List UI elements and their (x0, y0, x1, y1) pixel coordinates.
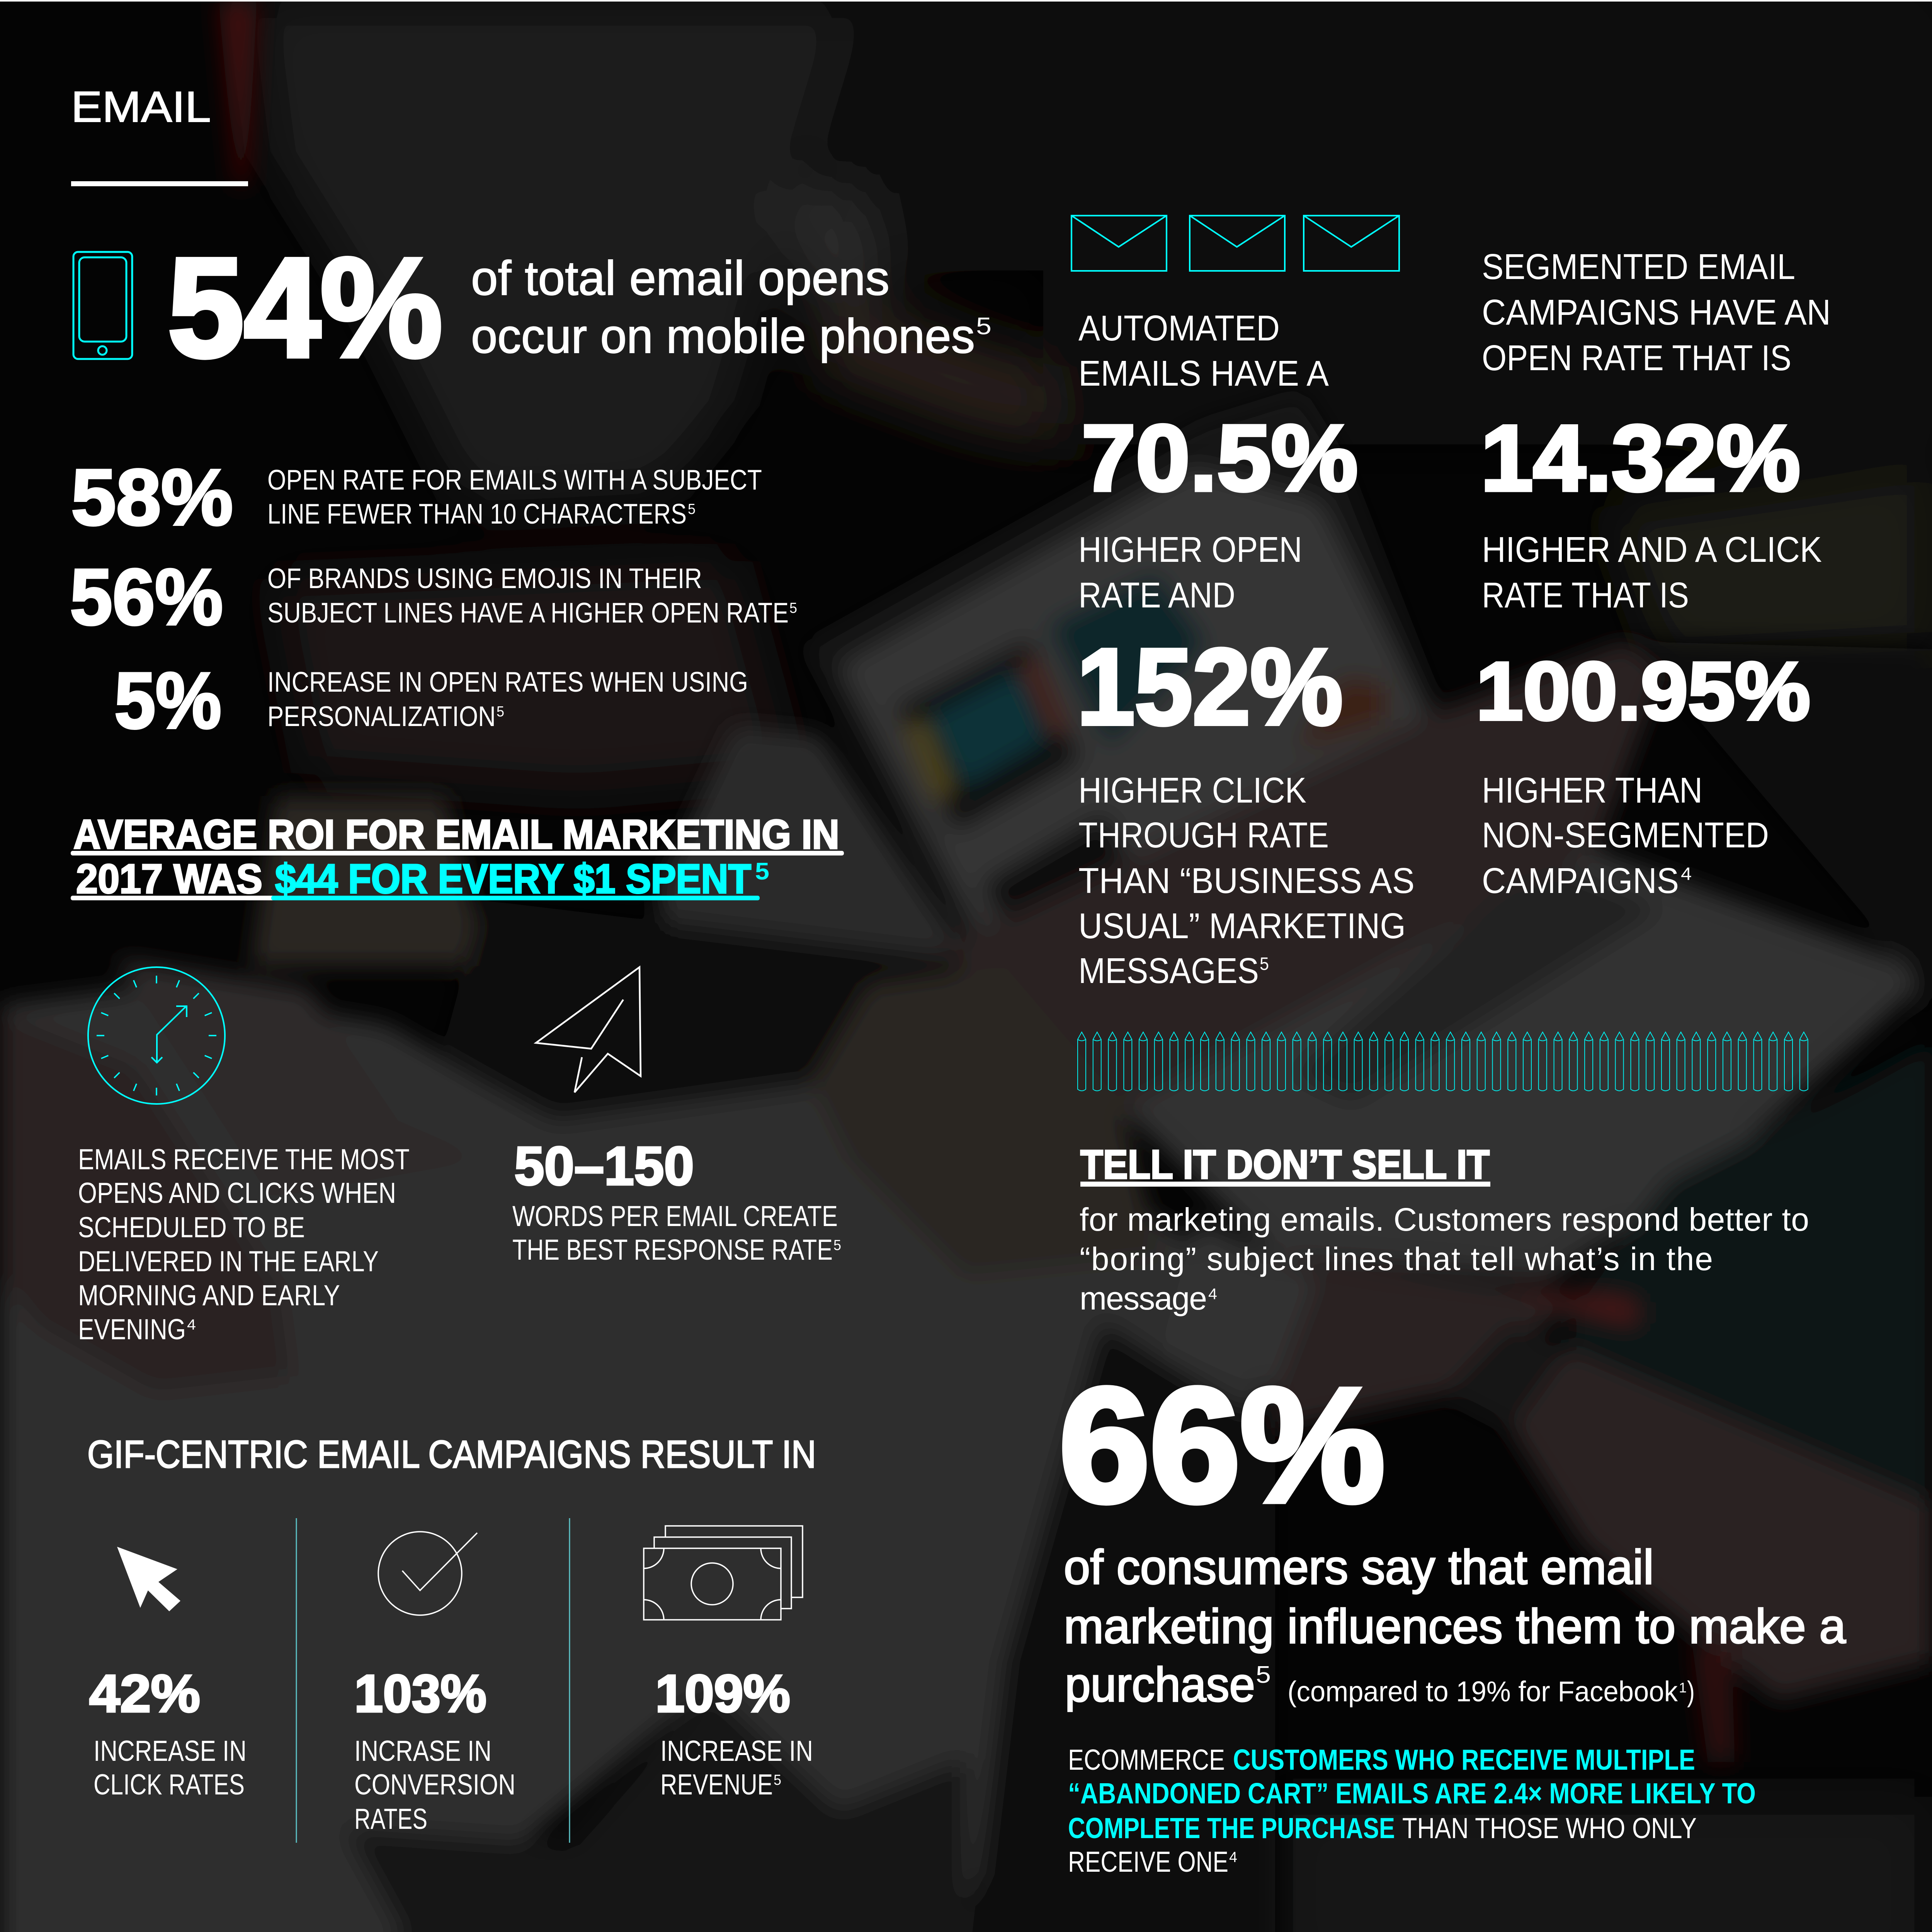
text: consumers influenced (1064, 1541, 1846, 1712)
column: segmented campaigns: 100.95% (1476, 645, 1810, 737)
column: automated emails: RATE AND (1078, 575, 1235, 615)
text: consumers influenced: (compared to 19% for Facebook (1287, 1675, 1678, 1708)
column: automated emails: EMAILS HAVE A (1078, 353, 1329, 393)
column: automated emails: AUTOMATED (1078, 308, 1280, 348)
stat: 109% revenue: REVENUE (660, 1768, 773, 1801)
text: best send time: MORNING AND EARLY (78, 1279, 340, 1311)
icon: mobile phone (73, 252, 132, 359)
stat: 109% revenue: INCREASE IN (660, 1735, 813, 1767)
column: segmented campaigns: NON-SEGMENTED (1482, 815, 1769, 855)
heading: average ROI: 5 (755, 858, 769, 885)
text: ecommerce abandoned cart (1068, 1743, 1756, 1878)
column: automated emails: HIGHER OPEN (1078, 529, 1302, 570)
column: automated emails (1077, 308, 1415, 991)
icon: clock (88, 967, 225, 1104)
text: marketing emails advice (1080, 1201, 1809, 1316)
stat: 5% personalization: 5 (497, 704, 504, 720)
text: consumers influenced: 5 (1256, 1662, 1271, 1688)
stat: 103% conversion: INCRASE IN (354, 1735, 492, 1767)
text: consumers influenced: 1 (1679, 1680, 1687, 1696)
stat: 5% personalization (114, 656, 748, 745)
stat: 42% click rates: INCREASE IN (94, 1735, 247, 1767)
text: best send time: EMAILS RECEIVE THE MOST (78, 1143, 410, 1175)
stat: 54% of total email opens: 54% (168, 229, 442, 386)
icon: cursor arrow (117, 1547, 180, 1611)
stat: 54% of total email opens: 5 (976, 313, 992, 340)
stat: 66%: 66% (1059, 1355, 1385, 1536)
text: ecommerce abandoned cart: COMPLETE THE PURCHASE (1068, 1812, 1395, 1844)
stat: 103% conversion (354, 1664, 515, 1835)
text: ecommerce abandoned cart: ECOMMERCE (1068, 1743, 1225, 1776)
text: best send time: OPENS AND CLICKS WHEN (78, 1177, 396, 1209)
column: automated emails: 152% (1077, 627, 1343, 747)
stat: 5% personalization: INCREASE IN OPEN RATES WHEN USING (267, 667, 748, 698)
text: best send time: DELIVERED IN THE EARLY (78, 1245, 379, 1277)
column: segmented campaigns: RATE THAT IS (1482, 575, 1689, 615)
title: EMAIL: EMAIL (71, 83, 211, 131)
text: ecommerce abandoned cart: 4 (1229, 1849, 1237, 1866)
text: marketing emails advice: for marketing emails. Customers respond better to (1080, 1201, 1809, 1238)
column: segmented campaigns: CAMPAIGNS (1482, 861, 1679, 901)
column: segmented campaigns: HIGHER THAN (1482, 770, 1702, 810)
text: ecommerce abandoned cart: “ABANDONED CART” EMAILS ARE 2.4× MORE LIKELY TO (1068, 1777, 1756, 1810)
column: automated emails: 70.5% (1082, 406, 1358, 510)
heading: tell it don't sell it: TELL IT DON’T SELL IT (1080, 1142, 1490, 1187)
stat: 58% open rate: 5 (688, 501, 696, 517)
column: segmented campaigns: 4 (1681, 864, 1692, 884)
column: automated emails: THROUGH RATE (1078, 815, 1329, 855)
column: segmented campaigns: HIGHER AND A CLICK (1482, 529, 1822, 570)
text: best send time (78, 1143, 410, 1345)
stat: 42% click rates: CLICK RATES (94, 1768, 245, 1801)
stat: 58% open rate: LINE FEWER THAN 10 CHARACTERS (267, 498, 687, 530)
text: consumers influenced: of consumers say that email (1064, 1541, 1654, 1594)
text: consumers influenced: marketing influences them to make a (1064, 1600, 1846, 1653)
stat: 50-150 words: THE BEST RESPONSE RATE (512, 1233, 833, 1266)
column: automated emails: USUAL” MARKETING (1078, 906, 1406, 946)
text: ecommerce abandoned cart: THAN THOSE WHO ONLY (1402, 1812, 1697, 1844)
title rule (71, 181, 248, 186)
stat: 58% open rate: OPEN RATE FOR EMAILS WITH A SUBJECT (267, 464, 762, 496)
text: marketing emails advice: “boring” subject lines that tell what’s in the (1080, 1241, 1713, 1277)
column: automated emails: MESSAGES (1078, 951, 1259, 991)
icon: paper plane (536, 967, 641, 1092)
column: segmented campaigns: 14.32% (1481, 406, 1800, 510)
stat: 103% conversion: CONVERSION (354, 1768, 515, 1801)
text: best send time: 4 (187, 1317, 196, 1333)
stat: 56% emojis: OF BRANDS USING EMOJIS IN THEIR (267, 563, 702, 594)
text: consumers influenced: purchase (1065, 1658, 1255, 1712)
stat: 54% of total email opens: of total email opens (471, 252, 889, 305)
stat: 5% personalization: PERSONALIZATION (267, 701, 496, 732)
stat: 50-150 words: 50–150 (514, 1135, 694, 1196)
divider lines (296, 1518, 570, 1843)
stat: 54% of total email opens: occur on mobile phones (471, 310, 975, 363)
column: segmented campaigns: OPEN RATE THAT IS (1482, 338, 1791, 378)
stat: 42% click rates: 42% (89, 1664, 200, 1723)
text: marketing emails advice: 4 (1208, 1286, 1217, 1303)
stat: 109% revenue (655, 1664, 813, 1801)
heading: average ROI: $44 FOR EVERY $1 SPENT (275, 855, 751, 902)
icon: check circle (378, 1532, 477, 1615)
stat: 50-150 words (512, 1135, 841, 1266)
stat: 56% emojis: SUBJECT LINES HAVE A HIGHER OPEN RATE (267, 597, 789, 629)
stat: 109% revenue: 109% (655, 1664, 790, 1723)
text: ecommerce abandoned cart: RECEIVE ONE (1068, 1845, 1228, 1878)
stat: 58% open rate (71, 453, 762, 542)
text: consumers influenced: ) (1687, 1675, 1695, 1708)
icon: banknotes (644, 1526, 803, 1620)
stat: 56% emojis: 5 (789, 600, 797, 616)
heading: average ROI: 2017 WAS (76, 855, 262, 902)
pencil row pictogram (1078, 1032, 1808, 1091)
stat: 50-150 words: WORDS PER EMAIL CREATE (512, 1200, 838, 1232)
text: ecommerce abandoned cart: CUSTOMERS WHO RECEIVE MULTIPLE (1233, 1743, 1695, 1776)
heading: GIF-centric campaigns: GIF-CENTRIC EMAIL CAMPAIGNS RESULT IN (87, 1433, 816, 1476)
column: segmented campaigns: SEGMENTED EMAIL (1482, 247, 1795, 287)
text: marketing emails advice: message (1080, 1280, 1207, 1316)
text: best send time: EVENING (78, 1313, 186, 1345)
stat: 109% revenue: 5 (774, 1772, 781, 1788)
stat: 54% of total email opens (168, 229, 992, 386)
column: automated emails: HIGHER CLICK (1078, 770, 1306, 810)
stat: 103% conversion: 103% (354, 1664, 486, 1723)
column: segmented campaigns: CAMPAIGNS HAVE AN (1482, 292, 1831, 332)
heading: average ROI: AVERAGE ROI FOR EMAIL MARKETING IN (73, 811, 839, 857)
heading: average ROI (71, 811, 844, 902)
stat: 103% conversion: RATES (354, 1803, 427, 1835)
stat: 50-150 words: 5 (833, 1237, 841, 1253)
column: automated emails: THAN “BUSINESS AS (1078, 861, 1415, 901)
column: automated emails: 5 (1260, 954, 1269, 974)
stat: 56% emojis: 56% (70, 553, 223, 641)
column: segmented campaigns (1476, 247, 1831, 901)
icon: three envelopes (1071, 216, 1399, 271)
stat: 5% personalization: 5% (114, 656, 221, 745)
text: best send time: SCHEDULED TO BE (78, 1211, 305, 1243)
stat: 56% emojis (70, 553, 797, 641)
stat: 42% click rates (89, 1664, 247, 1801)
stat: 58% open rate: 58% (71, 453, 233, 542)
